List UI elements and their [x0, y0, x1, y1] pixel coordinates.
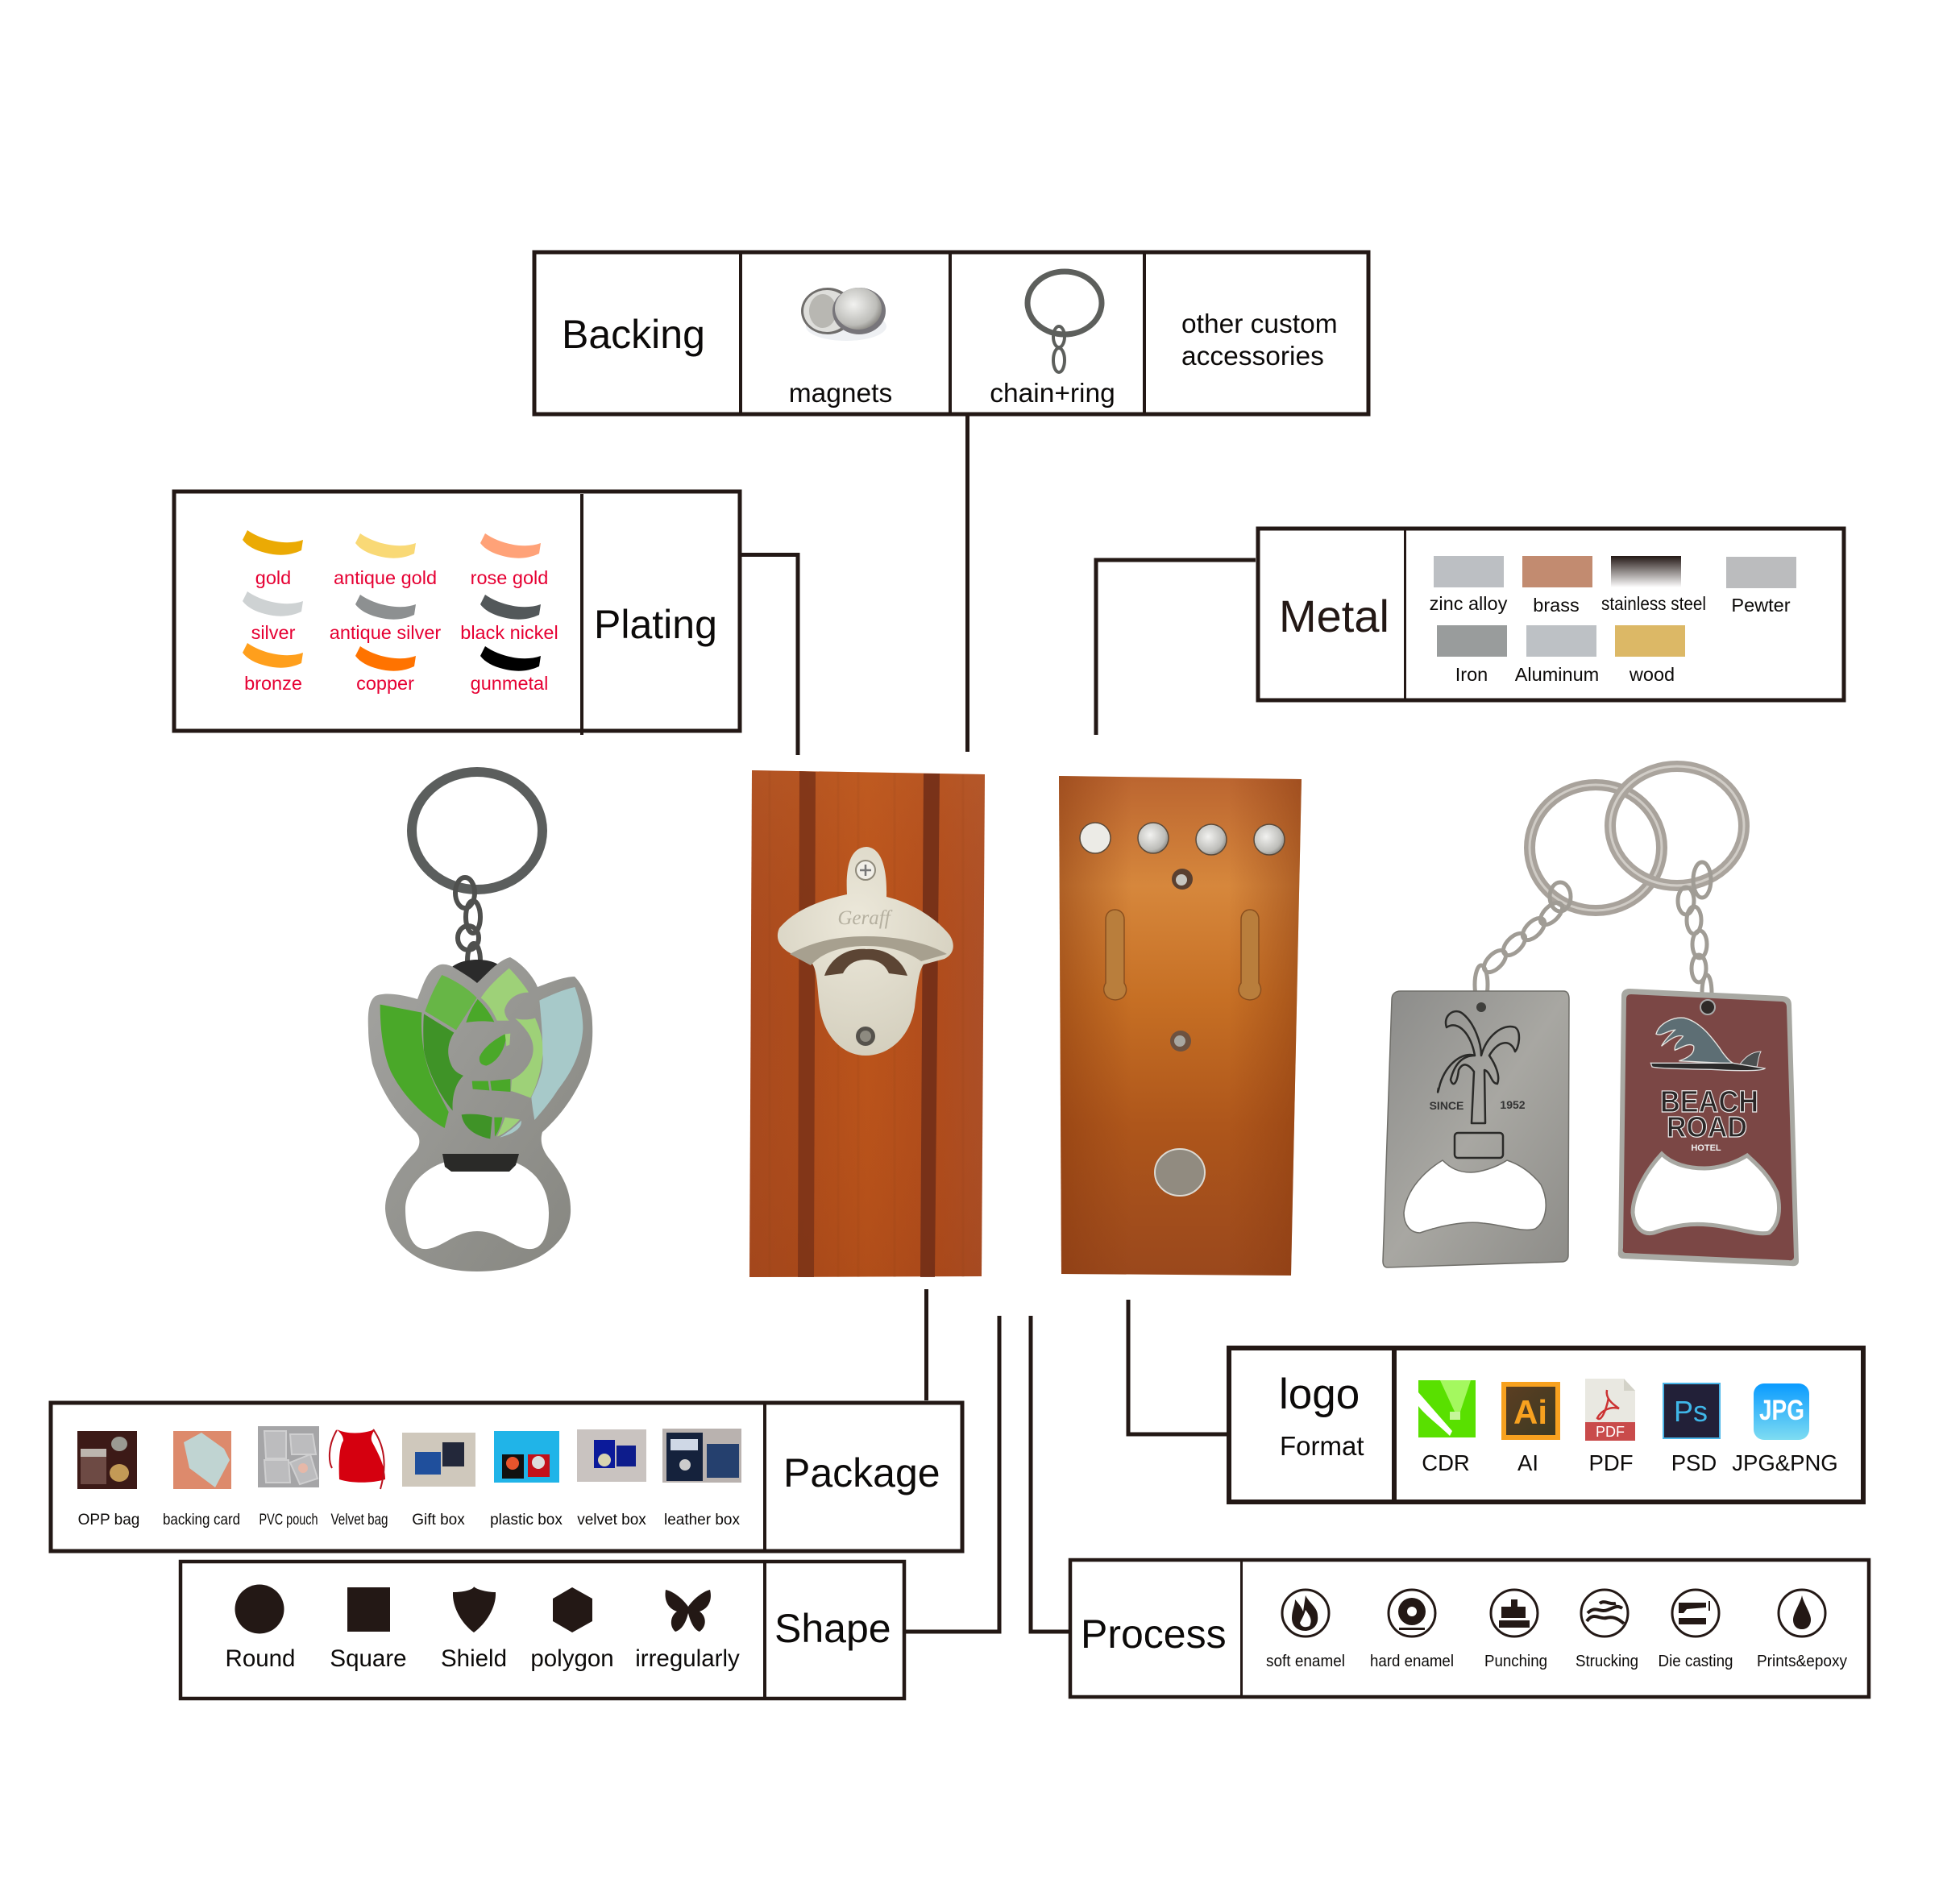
shape: round: Round — [226, 1645, 295, 1672]
shape: shield — [441, 1587, 507, 1672]
plating swatch: bronze — [243, 643, 303, 694]
plating swatch: antique gold — [334, 533, 437, 588]
metal swatch: aluminum: Aluminum — [1515, 664, 1599, 685]
icon: JPG — [1754, 1383, 1809, 1440]
plating swatch: copper — [355, 646, 416, 694]
hotel name text: HOTEL — [1691, 1143, 1721, 1153]
connector: backing to opener — [965, 416, 969, 752]
product: wood board with bottle opener, front — [749, 770, 985, 1277]
plating swatch: gunmetal — [471, 646, 548, 694]
panel: package — [51, 1403, 962, 1551]
panel: metal — [1258, 529, 1844, 700]
plate text — [1430, 1098, 1526, 1112]
chain — [1678, 862, 1712, 1010]
process icon: die casting: Die casting — [1659, 1653, 1733, 1670]
label: magnets: magnets — [789, 379, 892, 409]
plating swatch: antique silver: antique silver — [330, 622, 441, 643]
package: leather box: leather box — [664, 1512, 740, 1529]
heading: format: Format — [1280, 1431, 1364, 1461]
process icon: punching — [1484, 1590, 1547, 1670]
shape: polygon: polygon — [530, 1645, 614, 1672]
key ring — [412, 772, 542, 890]
enamel leaves — [380, 969, 583, 1139]
dark wood stripes — [798, 771, 816, 1277]
process icon: hard enamel: hard enamel — [1370, 1653, 1454, 1670]
key ring — [1530, 785, 1662, 911]
plating swatch: antique gold: antique gold — [334, 567, 437, 588]
metal swatch: wood — [1615, 625, 1685, 685]
heading: logo: logo — [1279, 1371, 1360, 1418]
product: silver palm keychain opener — [1383, 785, 1662, 1267]
shape: irregular butterfly — [635, 1590, 740, 1672]
package: velvet box — [577, 1429, 646, 1529]
product: beach road hotel keychain opener — [1610, 766, 1799, 1266]
plating swatch: silver: silver — [251, 622, 296, 643]
icon: PSD: Ps — [1674, 1395, 1708, 1428]
label: other custom accessories: other custom — [1181, 309, 1338, 339]
process icon: punching: Punching — [1484, 1653, 1547, 1670]
icon: JPG: JPG — [1759, 1395, 1804, 1426]
metal swatch: zinc alloy: zinc alloy — [1430, 593, 1508, 614]
panel: shape — [181, 1562, 904, 1699]
connector: shape to opener — [904, 1316, 999, 1632]
package: backing card: backing card — [163, 1512, 240, 1529]
icon: PSD — [1663, 1383, 1720, 1438]
package: velvet bag: Velvet bag — [330, 1512, 388, 1529]
metal swatch: zinc alloy — [1430, 556, 1508, 614]
metal swatch: pewter — [1726, 557, 1796, 616]
icon: magnets — [801, 288, 886, 341]
label: CDR: CDR — [1422, 1450, 1470, 1475]
shape: shield: Shield — [441, 1645, 507, 1672]
package: leather box — [662, 1429, 741, 1529]
label: PDF: PDF — [1589, 1450, 1633, 1475]
plate text: 1952 — [1500, 1098, 1526, 1111]
key ring — [1610, 766, 1744, 886]
icon: CDR — [1418, 1380, 1476, 1437]
connector: process to opener — [1031, 1316, 1070, 1632]
package: OPP bag — [77, 1431, 139, 1529]
icon: AI — [1501, 1382, 1560, 1440]
process icon: soft enamel — [1266, 1590, 1345, 1670]
product: green leaf keychain opener — [368, 772, 592, 1271]
plating swatch: antique silver — [330, 595, 441, 643]
process icon: prints and epoxy: Prints&epoxy — [1757, 1653, 1847, 1670]
icon: chain and ring — [1028, 272, 1102, 372]
heading: metal: Metal — [1279, 591, 1389, 641]
package: gift box: Gift box — [412, 1512, 465, 1529]
package: plastic box: plastic box — [490, 1512, 563, 1529]
panel: process — [1070, 1560, 1869, 1697]
plating swatch: silver — [243, 591, 303, 643]
plating swatch: gold — [243, 530, 303, 588]
bottle opening — [1633, 1154, 1779, 1234]
metal swatch: stainless steel — [1601, 556, 1706, 614]
metal swatch: iron — [1437, 625, 1507, 685]
wave artwork — [1650, 1018, 1765, 1071]
label: other custom accessories: accessories — [1181, 342, 1324, 371]
panel: logo format — [1229, 1348, 1863, 1502]
metal swatch: stainless steel: stainless steel — [1601, 593, 1706, 614]
process icon: soft enamel: soft enamel — [1266, 1653, 1345, 1670]
plating swatch: gunmetal: gunmetal — [471, 673, 548, 694]
palm tree outline — [1438, 1011, 1519, 1123]
heading: package: Package — [783, 1450, 940, 1495]
process icon: hard enamel — [1370, 1590, 1454, 1670]
shape: square: Square — [330, 1645, 407, 1672]
plating swatch: gold: gold — [255, 567, 291, 588]
hotel name text — [1660, 1085, 1758, 1153]
metal swatch: aluminum — [1515, 625, 1599, 685]
metal swatch: wood: wood — [1629, 664, 1675, 685]
plate — [1383, 991, 1569, 1267]
shape: round — [226, 1584, 295, 1672]
plating swatch: rose gold — [471, 533, 548, 588]
icon: PDF — [1585, 1379, 1635, 1441]
package: velvet box: velvet box — [577, 1512, 646, 1529]
process icon: strucking — [1576, 1590, 1638, 1670]
label: PSD: PSD — [1671, 1450, 1717, 1475]
label: chain and ring: chain+ring — [990, 379, 1115, 409]
screws — [1170, 869, 1193, 1052]
label: JPG&PNG: JPG&PNG — [1732, 1450, 1838, 1475]
shape: polygon — [530, 1587, 614, 1672]
hotel name text: ROAD — [1667, 1110, 1747, 1143]
chain — [1475, 882, 1571, 1004]
panel: backing — [534, 252, 1368, 414]
shape: irregular butterfly: irregularly — [635, 1645, 740, 1672]
plating swatch: rose gold: rose gold — [471, 567, 548, 588]
connector: metal to opener — [1096, 560, 1256, 735]
shape: square — [330, 1587, 407, 1672]
process icon: prints and epoxy — [1757, 1590, 1847, 1670]
package: gift box — [402, 1433, 475, 1529]
hotel name text: BEACH — [1660, 1085, 1758, 1119]
connector: package to opener — [924, 1289, 928, 1400]
chain — [455, 877, 480, 977]
metal swatch: brass — [1522, 556, 1592, 616]
connector: plating to opener — [741, 554, 798, 755]
product: wood board, back with magnets — [1059, 776, 1302, 1276]
heading: backing: Backing — [562, 312, 705, 357]
cast bottle opener: Geraff — [837, 907, 893, 929]
plate text: SINCE — [1430, 1099, 1463, 1112]
heading: shape: Shape — [774, 1606, 891, 1651]
large magnet — [1155, 1149, 1205, 1196]
label: AI: AI — [1517, 1450, 1538, 1475]
magnets — [1080, 823, 1285, 855]
metal swatch: brass: brass — [1533, 595, 1580, 616]
package: OPP bag: OPP bag — [78, 1512, 139, 1529]
package: plastic box — [490, 1431, 563, 1529]
metal swatch: iron: Iron — [1455, 664, 1488, 685]
process icon: die casting — [1659, 1590, 1733, 1670]
metal swatch: pewter: Pewter — [1731, 595, 1791, 616]
package: velvet bag — [330, 1429, 388, 1529]
package: PVC pouch: PVC pouch — [259, 1512, 318, 1529]
icon: PDF: PDF — [1596, 1424, 1625, 1440]
plating swatch: copper: copper — [356, 673, 414, 694]
package: backing card — [163, 1431, 240, 1529]
icon: AI: Ai — [1513, 1393, 1547, 1431]
package: PVC pouch — [258, 1426, 319, 1529]
heading: plating: Plating — [594, 602, 717, 647]
cast bottle opener — [778, 847, 953, 1056]
connector: logo format to opener — [1128, 1300, 1227, 1434]
panel: plating — [174, 492, 740, 735]
heading: process: Process — [1081, 1612, 1227, 1657]
plate — [1618, 989, 1799, 1266]
plating swatch: black nickel — [460, 595, 558, 643]
plating swatch: bronze: bronze — [244, 673, 302, 694]
keyhole slots — [1104, 910, 1260, 1000]
opener body — [368, 957, 592, 1271]
process icon: strucking: Strucking — [1576, 1653, 1638, 1670]
plating swatch: black nickel: black nickel — [460, 622, 558, 643]
